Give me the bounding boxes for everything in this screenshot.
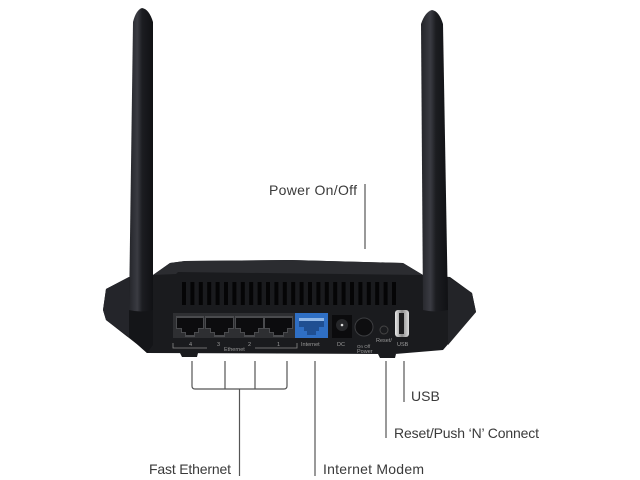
router body [103, 260, 476, 358]
label: USB [404, 361, 440, 404]
ethernet port labels [173, 342, 297, 353]
ethernet port labels: 4 [189, 342, 192, 348]
USB port: USB [397, 342, 409, 348]
DC power jack: DC [337, 342, 345, 348]
label: reset / push N connect: Reset/Push ‘N’ Connect [394, 425, 539, 441]
label: USB: USB [411, 388, 440, 404]
ethernet port labels: Ethernet [224, 347, 245, 353]
left antenna [129, 8, 153, 312]
ethernet ports [173, 313, 295, 338]
power button: On Off [357, 344, 371, 349]
power button [355, 318, 373, 355]
label: power on/off: Power On/Off [269, 182, 357, 198]
label: fast ethernet with bracket [149, 361, 287, 477]
right antenna [421, 10, 448, 312]
label: power on/off [269, 182, 365, 249]
label: internet modem: Internet Modem [323, 461, 424, 477]
label: fast ethernet with bracket: Fast Ethernet [149, 461, 231, 477]
ventilation slots [182, 282, 396, 305]
ethernet port labels: 2 [248, 342, 251, 348]
feet [180, 353, 198, 357]
DC power jack [332, 315, 352, 348]
USB port [395, 310, 409, 348]
reset button [376, 326, 392, 344]
reset button: Reset/ [376, 338, 392, 344]
ethernet port labels: 1 [277, 342, 280, 348]
internet port [295, 313, 328, 348]
internet port: Internet [301, 342, 320, 348]
power button: Power [357, 349, 373, 355]
ethernet port labels: 3 [217, 342, 220, 348]
label: internet modem [315, 361, 424, 477]
